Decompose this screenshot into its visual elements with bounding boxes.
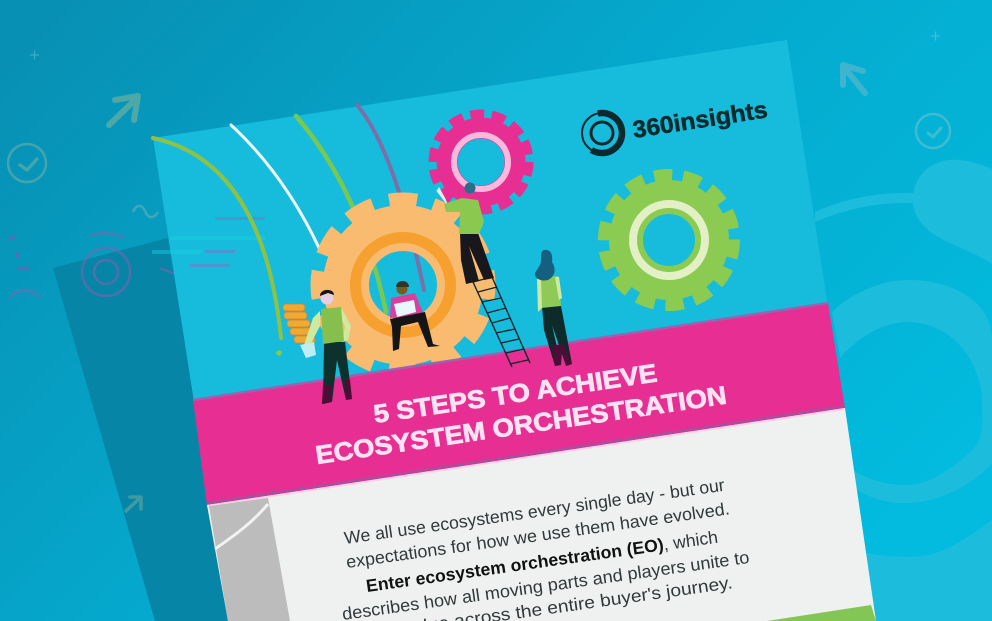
hair <box>535 250 555 281</box>
icon: arrow top left <box>109 96 138 125</box>
legs <box>390 312 440 351</box>
laptop <box>394 300 416 317</box>
green footer strip <box>767 605 876 621</box>
icon: small arrow on shadow page <box>126 497 141 511</box>
shirt <box>444 198 484 234</box>
legs <box>460 233 494 284</box>
background blob shapes <box>815 160 992 621</box>
figure: woman <box>535 250 572 366</box>
arms <box>304 309 351 347</box>
legs <box>323 342 352 404</box>
icon: check circle right <box>916 114 950 148</box>
band edge highlight <box>193 303 845 506</box>
coin stack <box>283 304 315 343</box>
figure: climber <box>437 182 494 284</box>
orbit arcs <box>153 105 424 356</box>
icon: arrow top right <box>843 65 865 93</box>
figure: man with vest <box>300 290 352 404</box>
title: 5 STEPS TO ACHIEVE <box>372 359 659 429</box>
grey side strip <box>209 498 290 621</box>
head <box>320 292 334 304</box>
top <box>538 276 561 308</box>
shadow page <box>53 238 230 621</box>
arms <box>537 277 562 312</box>
icon: orange gear <box>319 201 487 369</box>
icon: check circle left <box>8 144 46 182</box>
legs lower over band <box>322 380 352 404</box>
intro text: Enter ecosystem orchestration (EO), which <box>365 527 719 596</box>
ladder <box>473 277 530 367</box>
legs lower over band <box>552 345 572 366</box>
title: ECOSYSTEM ORCHESTRATION <box>314 382 728 470</box>
logo mark <box>582 113 622 153</box>
hair <box>320 290 334 296</box>
icon: pink gear <box>434 115 528 209</box>
vest <box>321 307 344 344</box>
intro text: expectations for how we use them have evolved. <box>345 498 731 572</box>
logo wordmark: 360insights <box>631 96 769 144</box>
intro text: We all use ecosystems every single day - but our <box>343 475 726 548</box>
icon: squiggle <box>133 206 158 217</box>
title band <box>193 303 845 505</box>
figure: seated man with laptop <box>390 281 440 351</box>
intro text <box>341 475 751 621</box>
head <box>396 284 408 294</box>
hair <box>396 281 409 287</box>
legs <box>542 306 572 366</box>
icon: green gear <box>605 176 733 304</box>
body panel <box>207 408 876 621</box>
decorative plus signs <box>30 32 940 360</box>
ghost text artefact on page <box>152 217 265 267</box>
head <box>464 182 476 194</box>
ghost logo artefact <box>8 233 196 298</box>
logo <box>582 96 769 153</box>
glass <box>300 342 316 358</box>
page: illustrated cover <box>153 40 876 621</box>
raised arm <box>437 188 447 204</box>
jacket <box>390 293 424 318</box>
